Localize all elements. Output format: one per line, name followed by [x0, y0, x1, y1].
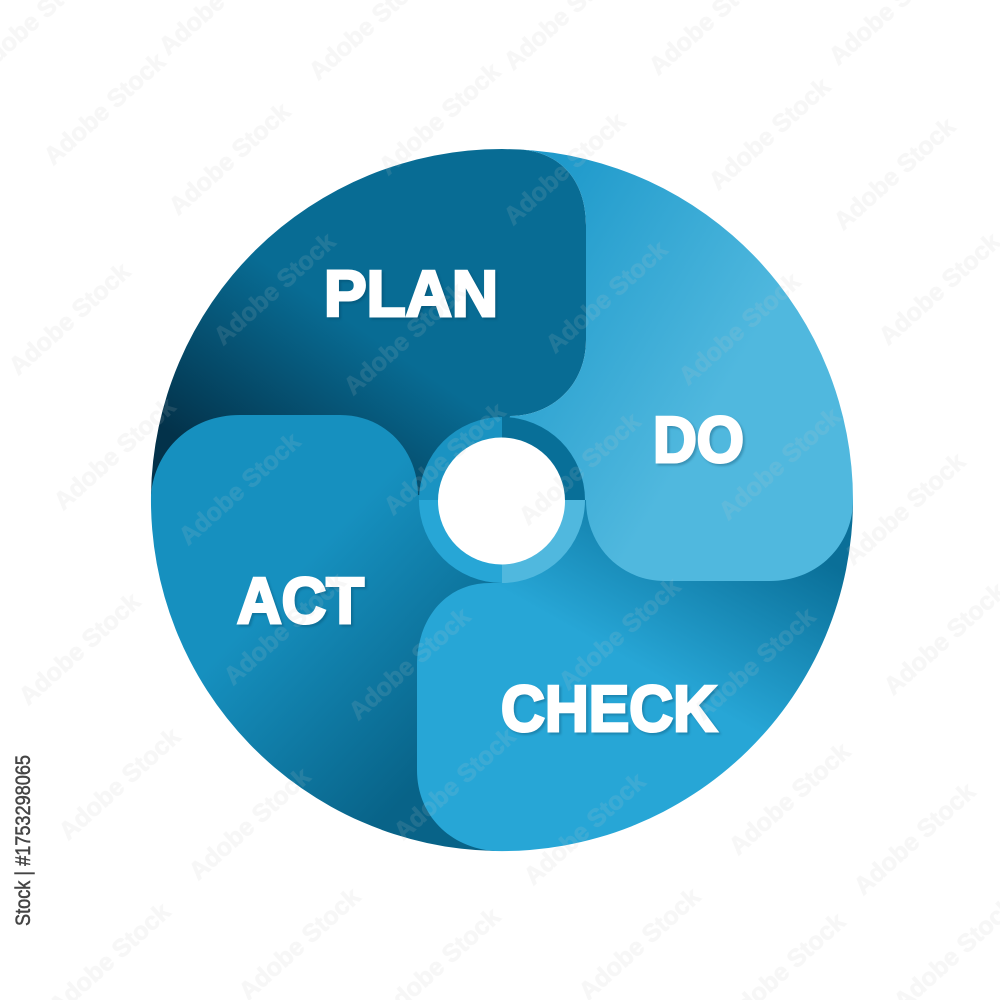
stock watermark pattern: Adobe Stock: [829, 112, 961, 236]
stock watermark pattern: Adobe Stock: [49, 392, 181, 516]
label: DO: DO: [653, 403, 744, 476]
stock watermark pattern: Adobe Stock: [339, 277, 471, 401]
panel: check segment: [417, 500, 853, 851]
stock watermark pattern: Adobe Stock: [184, 762, 316, 886]
stock watermark pattern: Adobe Stock: [519, 767, 651, 891]
stock id caption: Stock | #1753298065: [12, 755, 35, 926]
stock watermark pattern: Adobe Stock: [344, 602, 476, 726]
panel: plan segment: [151, 149, 586, 500]
ring quarter: act: [419, 417, 502, 500]
centre ring: [419, 417, 585, 583]
stock watermark pattern: Adobe Stock: [39, 47, 171, 171]
label: PLAN: PLAN: [324, 257, 498, 330]
ring quarter: do: [502, 500, 585, 583]
stock watermark pattern: Adobe Stock: [541, 235, 673, 359]
ring quarter: check: [419, 500, 502, 583]
stock watermark pattern: Adobe Stock: [14, 587, 146, 711]
stock watermark pattern: Adobe Stock: [724, 737, 856, 861]
panel: act segment: [151, 415, 502, 851]
label: CHECK: CHECK: [501, 672, 717, 745]
stock watermark pattern: Adobe Stock: [839, 447, 971, 571]
stock watermark pattern: Adobe Stock: [174, 427, 306, 551]
stock watermark pattern: Adobe Stock: [389, 722, 521, 846]
stock watermark pattern: Adobe Stock: [704, 72, 836, 196]
stock watermark pattern: Adobe Stock: [4, 257, 136, 381]
stock watermark pattern: Adobe Stock: [689, 602, 821, 726]
label: ACT: ACT: [237, 564, 364, 637]
stock watermark pattern: Adobe Stock: [209, 227, 341, 351]
stock watermark pattern: Adobe Stock: [499, 107, 631, 231]
PDCA circular diagram: [151, 149, 853, 851]
stock watermark pattern: Adobe Stock: [379, 397, 511, 521]
stock watermark pattern: Adobe Stock: [164, 97, 296, 221]
stock watermark pattern: Adobe Stock: [674, 267, 806, 391]
stock watermark pattern: Adobe Stock: [219, 567, 351, 691]
stock watermark pattern: Adobe Stock: [554, 572, 686, 696]
stock watermark pattern: Adobe Stock: [714, 402, 846, 526]
centre white circle: [438, 438, 565, 564]
stock watermark pattern: Adobe Stock: [849, 777, 981, 901]
stock watermark pattern: Adobe Stock: [374, 57, 506, 181]
panel: do segment: [510, 150, 853, 581]
stock watermark pattern: Adobe Stock: [54, 722, 186, 846]
stock watermark pattern: Adobe Stock: [514, 407, 646, 531]
ring quarter: plan: [502, 417, 585, 500]
